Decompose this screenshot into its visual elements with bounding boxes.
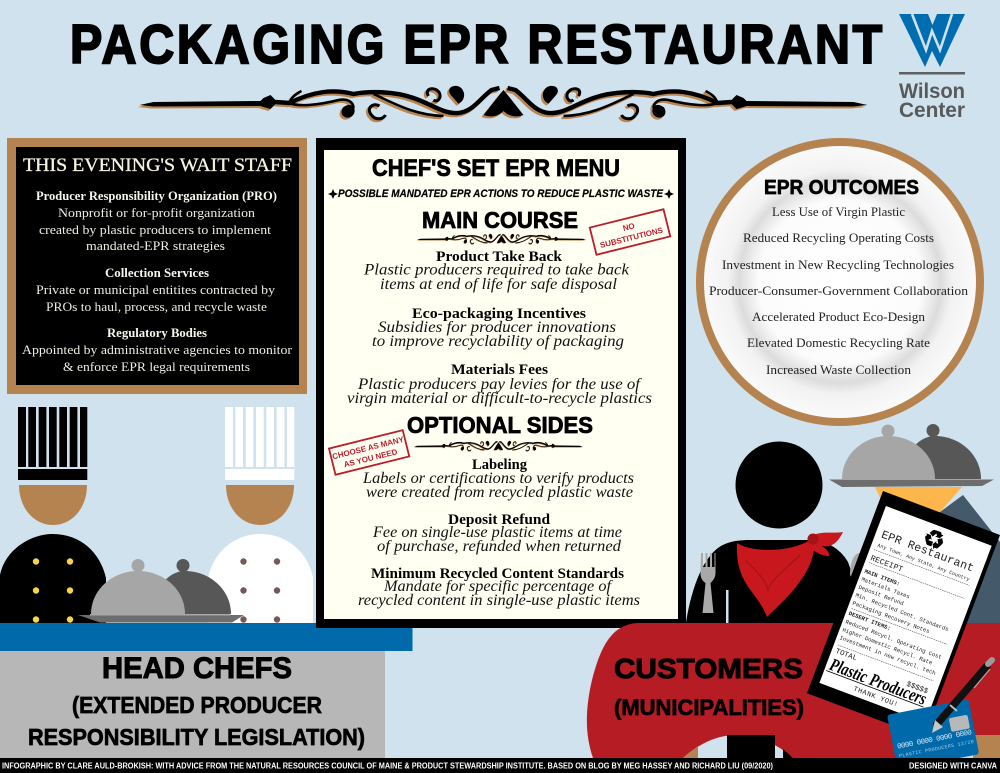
- receipt text: Higher Domestic Recycl. Rate: [841, 626, 934, 667]
- menu item: eco-packaging incentives: Subsidies for producer innovations: [378, 319, 616, 336]
- outcomes list: Producer-Consumer-Government Collaboration: [709, 284, 969, 298]
- menu item: materials fees: virgin material or difficult-to-recycle plastics: [347, 390, 652, 407]
- heading: head chefs: HEAD CHEFS: [102, 652, 292, 685]
- menu item: labeling: were created from recycled plastic waste: [366, 484, 633, 501]
- receipt text: RECEIPT: [869, 554, 904, 575]
- menu item: deposit refund: Deposit Refund: [448, 512, 551, 528]
- receipt text: Plastic Producers: [826, 654, 929, 709]
- staff: collection services: PROs to haul, process, and recycle waste: [46, 299, 267, 314]
- menu item: labeling: [362, 457, 634, 501]
- icon: chefs' cloches: [78, 559, 244, 622]
- icon: Wilson Center logo: Wilson: [899, 80, 965, 103]
- counter: head chefs: [0, 623, 412, 758]
- receipt text: Deposit Refund: [857, 584, 905, 607]
- panel: EPR outcomes plate: [700, 142, 980, 422]
- staff: regulatory bodies: Regulatory Bodies: [107, 325, 207, 340]
- menu item: minimum recycled content: [358, 566, 640, 609]
- stamp: no substitutions: NO: [622, 221, 636, 233]
- receipt text: THANK YOU!: [852, 686, 899, 710]
- outcomes list: Investment in New Recycling Technologies: [722, 258, 954, 272]
- outcomes list: Reduced Recycling Operating Costs: [743, 231, 934, 245]
- icon: white-uniform chef: [208, 407, 313, 623]
- staff: collection services: Collection Services: [105, 265, 209, 280]
- icon: knife handle: [850, 553, 860, 590]
- menu item: eco-packaging incentives: Eco-packaging Incentives: [412, 306, 586, 322]
- stamp: no substitutions: SUBSTITUTIONS: [599, 226, 664, 250]
- heading: menu: CHEF'S SET EPR MENU: [372, 155, 620, 182]
- table: customers: [587, 623, 1000, 758]
- outcomes list: Less Use of Virgin Plastic: [772, 205, 905, 219]
- title ornament: [138, 86, 868, 121]
- subheading: legislation: RESPONSIBILITY LEGISLATION): [28, 724, 365, 750]
- card numbers: 0000 0000 0000 0000: [897, 729, 973, 752]
- footer: [0, 758, 1000, 773]
- ornament: main course: [417, 234, 586, 244]
- icon: red bandana: [737, 532, 843, 617]
- receipt text: Packaging Recovery Notes: [851, 600, 931, 635]
- heading: EPR outcomes: EPR OUTCOMES: [764, 176, 919, 199]
- outcomes list: Increased Waste Collection: [766, 363, 912, 377]
- receipt text: DESERT ITEMS:: [848, 610, 892, 632]
- menu item: product take back: items at end of life for safe disposal: [380, 276, 617, 293]
- outcomes list: Elevated Domestic Recycling Rate: [747, 336, 930, 350]
- staff: regulatory bodies: [22, 325, 293, 374]
- icon: pen: [932, 660, 992, 733]
- icon: recycling symbol: ♻: [919, 522, 950, 557]
- menu item: eco-packaging incentives: [372, 306, 624, 350]
- menu item: minimum recycled content: Minimum Recycled Content Standards: [371, 566, 624, 582]
- subheading: legislation: [28, 692, 365, 750]
- menu item: materials fees: Plastic producers pay levies for the use of: [357, 376, 643, 393]
- staff: collection services: [36, 265, 276, 314]
- staff: PRO: Nonprofit or for-profit organization: [58, 205, 256, 220]
- heading: optional sides: OPTIONAL SIDES: [407, 412, 593, 438]
- menu item: materials fees: [347, 362, 652, 407]
- receipt text: EPR Restaurant: [879, 529, 976, 575]
- subheading: legislation: (EXTENDED PRODUCER: [72, 692, 322, 718]
- receipt text: Any Town, Any State, Any Country: [876, 543, 970, 583]
- menu item: labeling: Labels or certifications to verify products: [362, 470, 634, 487]
- receipt text: MAIN ITEMS:: [863, 568, 901, 588]
- heading: main course: MAIN COURSE: [422, 207, 578, 233]
- menu item: product take back: [363, 249, 630, 293]
- receipt text: [822, 527, 977, 718]
- stamp: choose as many: CHOOSE AS MANY: [331, 435, 405, 461]
- menu item: labeling: Labeling: [472, 457, 527, 473]
- title: PACKAGING EPR RESTAURANT: [70, 13, 883, 75]
- heading: customers: CUSTOMERS: [614, 653, 803, 684]
- menu item: deposit refund: of purchase, refunded when returned: [377, 538, 621, 555]
- credit text: INFOGRAPHIC BY CLARE AULD-BROKISH: WITH ADVICE FROM THE NATURAL RESOURCES COUNCIL OF MAINE & PRODUCT STEWARDSHIP INSTITUTE. BASED ON BLOG BY MEG HASSEY AND RICHARD LIU (09/2020): [2, 762, 773, 770]
- staff: collection services: Private or municipal entitites contracted by: [36, 282, 276, 297]
- stamp: no substitutions: [590, 209, 670, 255]
- staff: PRO: [36, 188, 277, 253]
- panel: wait staff: [7, 138, 307, 394]
- receipt text: Min. Recycled Cont. Standards: [854, 592, 950, 633]
- table legs: [683, 735, 1000, 758]
- panel: menu: [316, 138, 686, 628]
- menu item: deposit refund: Fee on single-use plastic items at time: [372, 524, 622, 541]
- icon: waiter with cloches: [829, 424, 1000, 623]
- menu item: eco-packaging incentives: to improve recyclability of packaging: [372, 333, 624, 350]
- staff: PRO: created by plastic producers to implement: [39, 222, 271, 237]
- menu item: deposit refund: [372, 512, 622, 555]
- receipt: [807, 491, 1000, 737]
- heading: wait staff: THIS EVENING'S WAIT STAFF: [23, 156, 292, 176]
- icon: Wilson Center logo: [899, 14, 965, 122]
- menu item: materials fees: Materials Fees: [451, 362, 548, 378]
- icon: Wilson Center logo: Center: [899, 99, 965, 122]
- receipt text: Reduced Recycl. Operating Cost: [844, 618, 943, 661]
- icon: credit card: [887, 699, 979, 770]
- staff: regulatory bodies: Appointed by administrative agencies to monitor: [22, 342, 293, 357]
- menu item: product take back: Product Take Back: [436, 249, 563, 265]
- icon: fork: [700, 553, 716, 613]
- subheading: menu: POSSIBLE MANDATED EPR ACTIONS TO REDUCE PLASTIC WASTE: [338, 188, 664, 200]
- stamp: choose as many: AS YOU NEED: [343, 447, 399, 469]
- ornament: optional sides: [414, 441, 583, 451]
- menu item: minimum recycled content: recycled content in single-use plastic items: [358, 592, 640, 609]
- card chip: [949, 715, 970, 732]
- receipt text: Materials Taxes: [860, 576, 911, 600]
- icon: black-uniform chef: [0, 407, 106, 623]
- icon: customer: [686, 442, 860, 623]
- subheading: municipalities: (MUNICIPALITIES): [614, 695, 804, 720]
- receipt text: TOTAL: [834, 648, 858, 663]
- staff: regulatory bodies: & enforce EPR legal requirements: [63, 359, 250, 374]
- staff: PRO: mandated-EPR strategies: [86, 238, 225, 253]
- stamp: choose as many: [329, 430, 409, 475]
- receipt text: Investment in new recycl. tech: [838, 634, 937, 677]
- receipt text: $$$$$: [905, 681, 929, 696]
- menu item: product take back: Plastic producers required to take back: [363, 262, 630, 278]
- outcomes list: [709, 205, 969, 377]
- menu item: minimum recycled content: Mandate for specific percentage of: [383, 578, 614, 595]
- outcomes list: Accelerated Product Eco-Design: [752, 310, 926, 324]
- card numbers: PLASTIC PRODUCERS 12/20: [899, 739, 974, 759]
- staff: PRO: Producer Responsibility Organization (PRO): [36, 188, 277, 203]
